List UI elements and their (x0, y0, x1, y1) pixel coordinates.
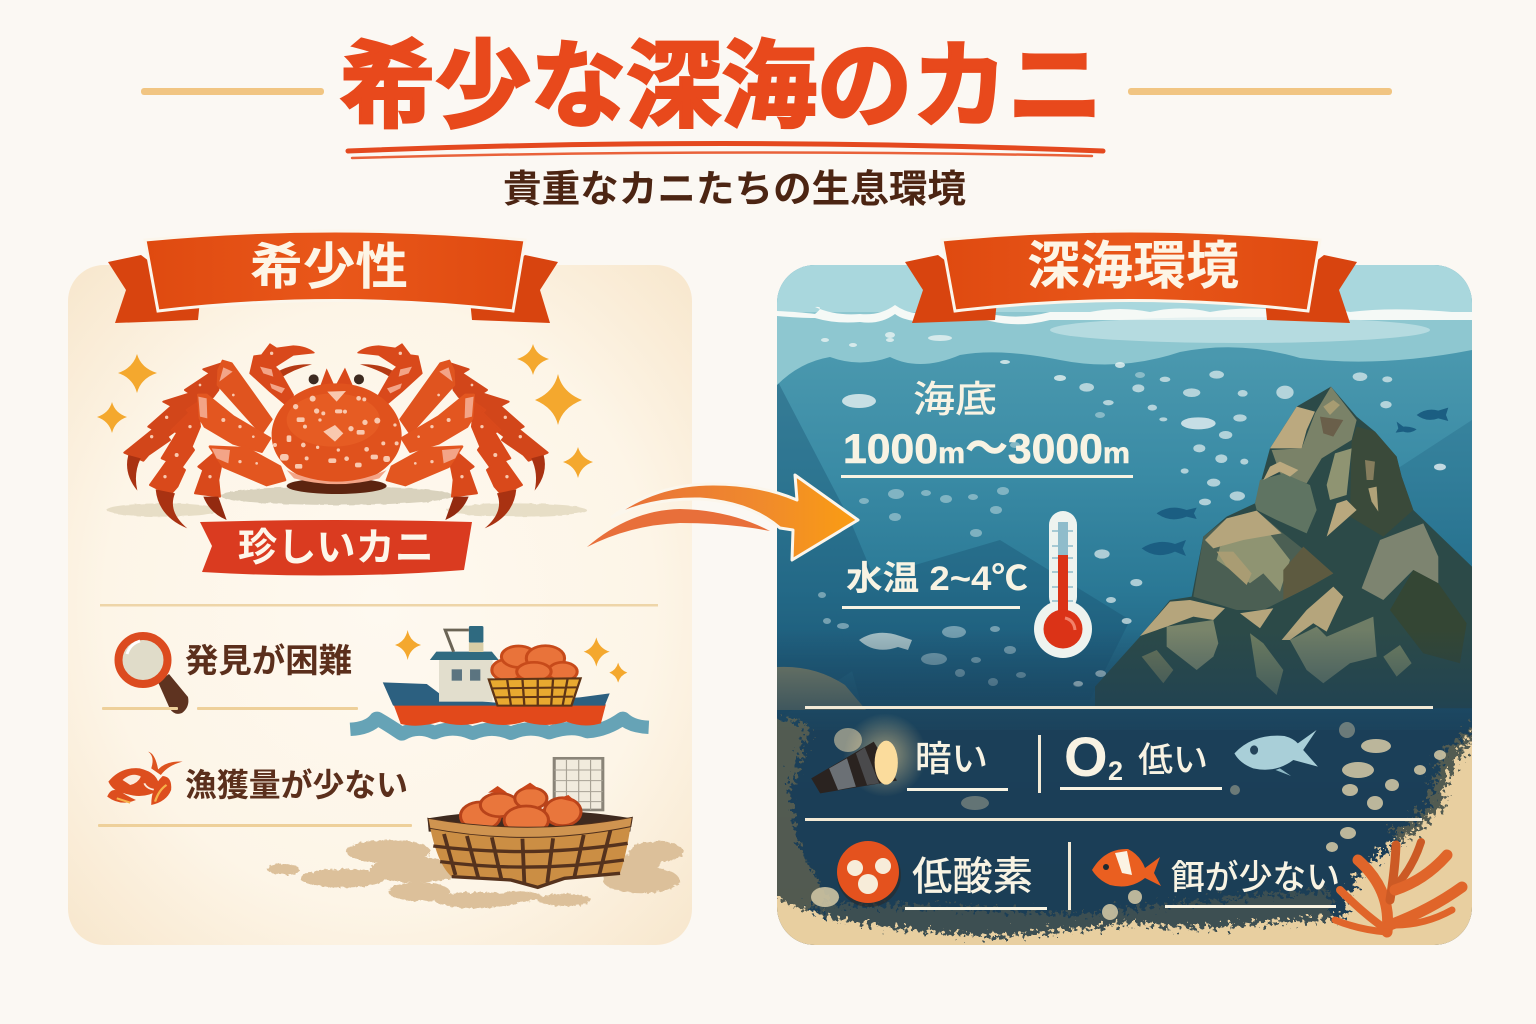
pale fish (859, 633, 912, 650)
depth label (841, 379, 1133, 478)
ribbon heading: rarity (108, 231, 558, 323)
icon: pale fish (1234, 730, 1318, 776)
section dividers (805, 706, 1433, 910)
icon: thermometer (1034, 511, 1092, 658)
icon: coral (1335, 842, 1462, 932)
depth label: 1000m〜3000m (843, 425, 1130, 472)
water background (777, 265, 1472, 945)
title (141, 34, 1392, 158)
label: dark (907, 738, 1008, 791)
basket of crabs (267, 758, 683, 908)
label: low O2: 2 (1108, 756, 1123, 786)
ribbon heading: rarity: 希少性 (250, 239, 408, 295)
label: low oxygen: 低酸素 (912, 855, 1033, 899)
panel background (68, 265, 692, 945)
arrow from rarity to habitat (587, 475, 858, 560)
crab left legs and claw (124, 344, 314, 528)
banner: rare crab: 珍しいカニ (238, 527, 434, 570)
water temperature label: 水温 2~4℃ (846, 560, 1028, 598)
undersea rock (1095, 387, 1472, 708)
label: low oxygen (905, 855, 1047, 910)
sand and seabed (777, 714, 1472, 945)
label: dark: 暗い (915, 738, 988, 779)
icon: low oxygen circle (837, 841, 901, 907)
ribbon heading: deep sea environment: 深海環境 (1027, 238, 1239, 296)
fishing boat illustration (350, 626, 649, 734)
bubbles and particles (818, 332, 1446, 687)
panel: rarity (68, 231, 692, 945)
icon: clownfish (1092, 849, 1161, 886)
icon: small crab (107, 752, 183, 805)
ribbon heading: deep sea environment (905, 231, 1357, 323)
label: low O2 (1060, 737, 1222, 790)
crab illustration (107, 344, 587, 528)
label: small catch: 漁獲量が少ない (185, 767, 408, 803)
icon: flashlight (811, 713, 927, 797)
panel: deep sea environment (777, 265, 1472, 945)
label: little food: 餌が少ない (1171, 859, 1340, 897)
divider (100, 604, 658, 606)
darker water patches (777, 384, 1472, 652)
icon: magnifying glass (118, 636, 188, 714)
label: hard to find (102, 642, 358, 710)
label: hard to find: 発見が困難 (185, 642, 352, 679)
subtitle: 貴重なカニたちの生息環境 (503, 169, 966, 211)
label: small catch (98, 767, 412, 827)
banner: rare crab (200, 520, 472, 576)
title: 希少な深海のカニ (340, 34, 1103, 140)
label: low O2: O (1064, 725, 1108, 788)
small fish (1142, 408, 1448, 556)
surface and waves (777, 265, 1472, 385)
label: low O2: 低い (1138, 741, 1208, 780)
dark lower water overlay (777, 636, 1472, 730)
left seabed mound (777, 667, 866, 710)
sparkles around crab (97, 344, 593, 478)
depth label: 海底 (913, 379, 997, 420)
